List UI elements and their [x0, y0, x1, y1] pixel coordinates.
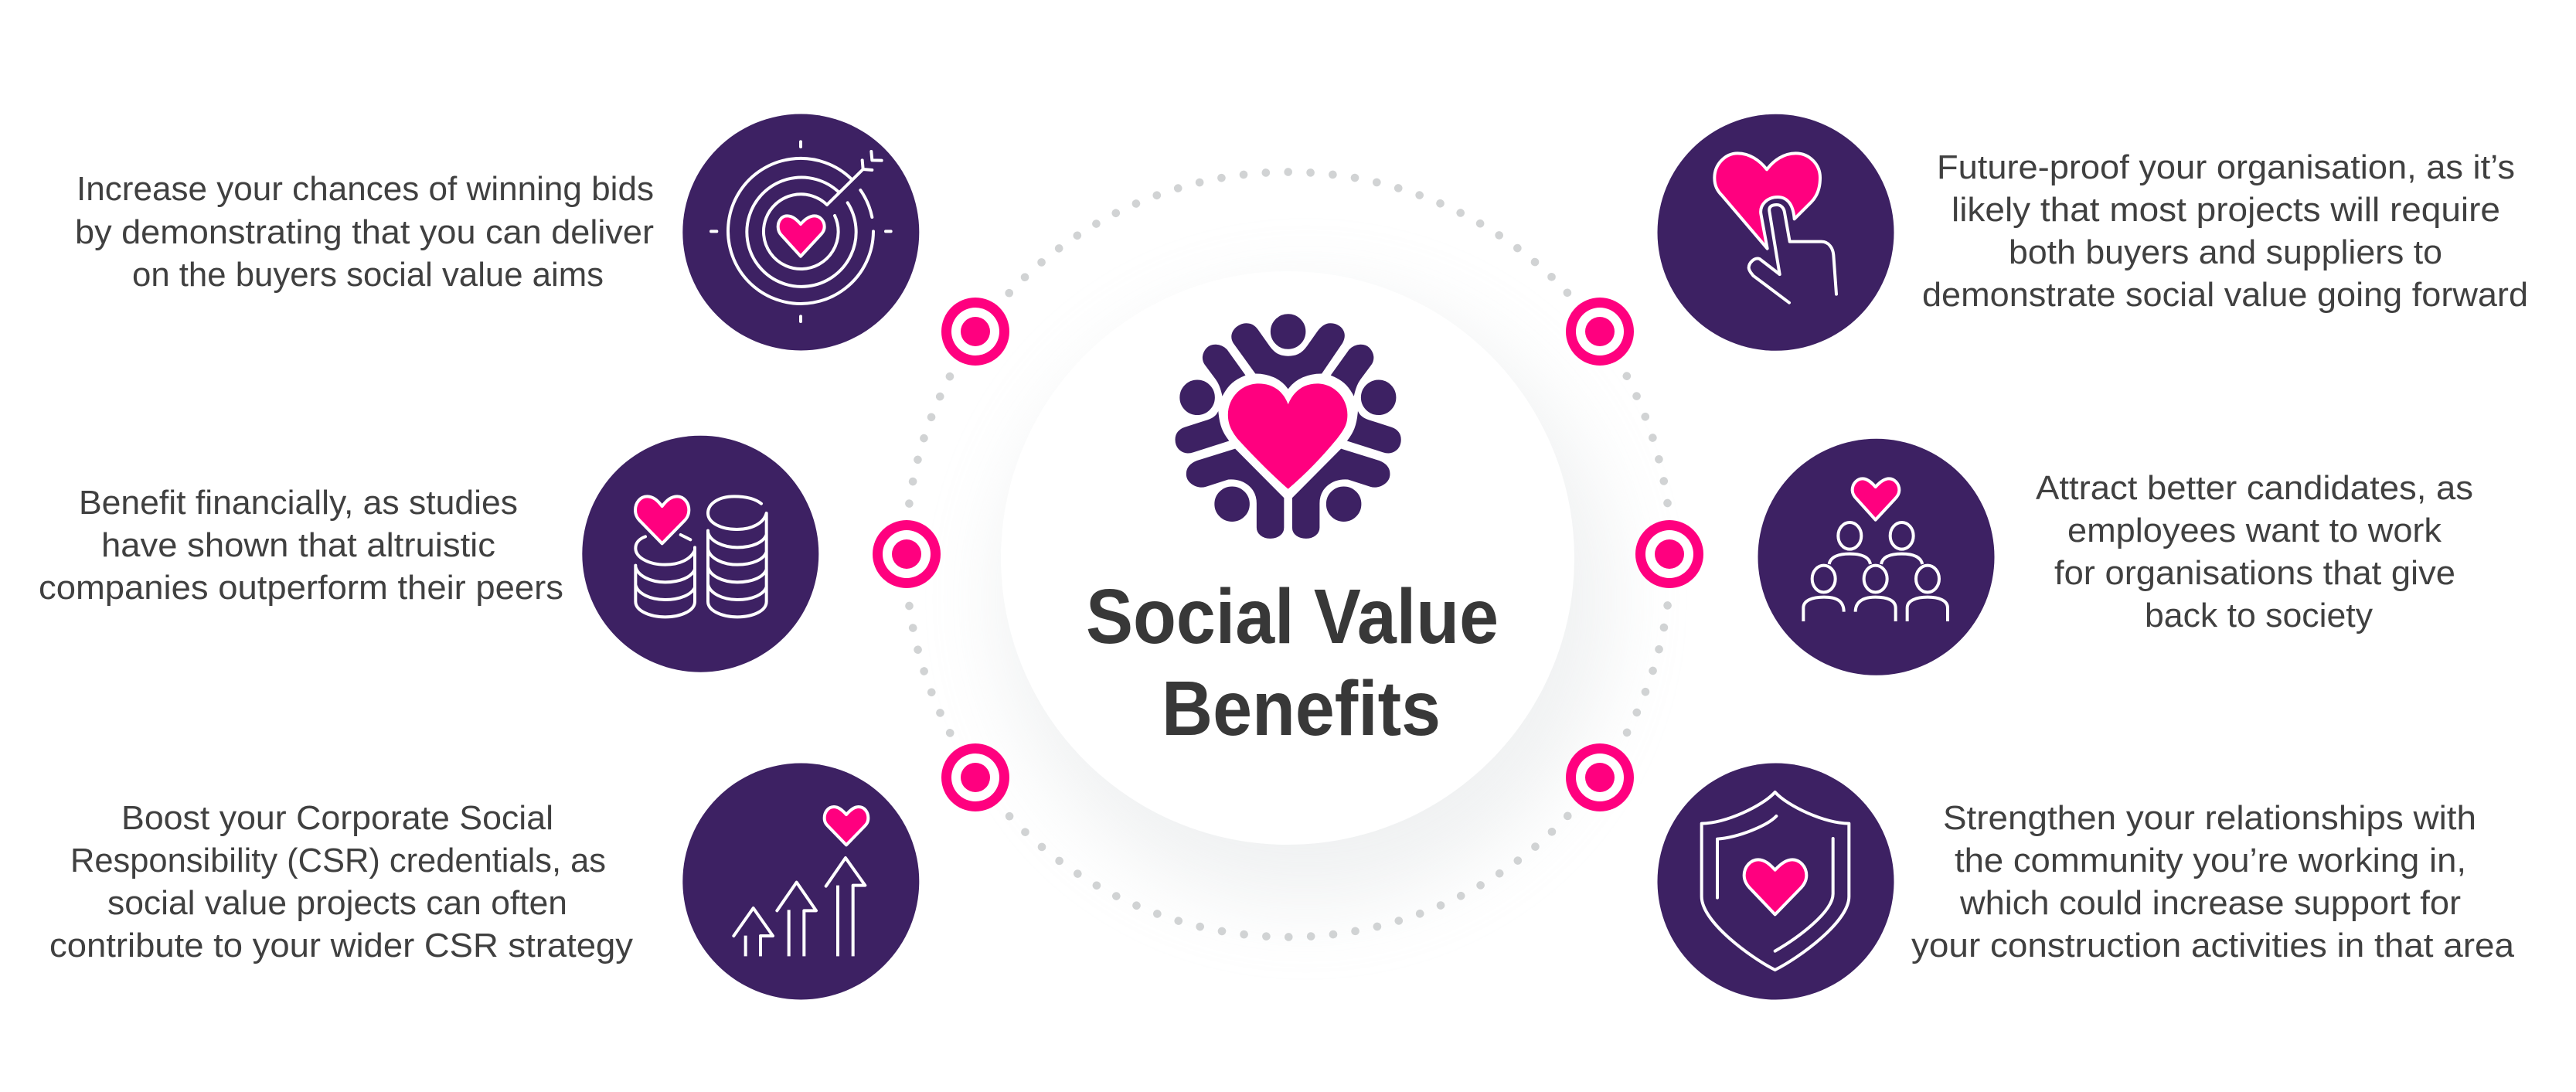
text: winning bids [75, 170, 654, 294]
marker: bottom right [1566, 743, 1634, 811]
text: attract candidates: Attract better candidates, as [2036, 469, 2473, 507]
icon: rising arrows with heart [682, 764, 919, 1000]
text: CSR credentials [49, 799, 633, 964]
icon: hand pressing heart [1657, 114, 1894, 351]
text: strengthen relationships: Strengthen your relationships with [1943, 799, 2476, 837]
marker: bottom left [941, 743, 1009, 811]
title: Benefits [1162, 665, 1441, 752]
icon: central people and heart logo [1176, 315, 1400, 538]
marker: middle right [1635, 520, 1703, 588]
text: attract candidates: for organisations that give [2054, 554, 2455, 592]
text: winning bids: by demonstrating that you can deliver [75, 213, 654, 251]
text: CSR credentials: Boost your Corporate Social [121, 799, 553, 837]
marker: top right [1566, 298, 1634, 366]
text: winning bids: Increase your chances of winning bids [77, 170, 654, 208]
text: attract candidates [2036, 469, 2473, 634]
text: benefit financially [39, 484, 563, 607]
central circle with soft shadow [1001, 271, 1611, 904]
marker: top left [941, 298, 1009, 366]
text: attract candidates: employees want to work [2067, 512, 2442, 549]
icon: shield with heart [1657, 764, 1894, 1000]
text: future-proof: Future-proof your organisation, as it’s [1937, 148, 2515, 186]
text: future-proof [1922, 148, 2528, 314]
text: benefit financially: have shown that altruistic [101, 526, 495, 564]
text: attract candidates: back to society [2145, 597, 2373, 634]
text: CSR credentials: contribute to your wider CSR strategy [49, 927, 633, 964]
text: strengthen relationships: which could increase support for [1959, 884, 2461, 922]
dotted ring [909, 172, 1668, 937]
text: benefit financially: Benefit financially, as studies [79, 484, 518, 522]
icon: coin stacks with heart [582, 436, 818, 672]
icon: target with arrow and heart [682, 114, 919, 351]
marker: middle left [873, 520, 941, 588]
title [1086, 573, 1499, 752]
text: future-proof: likely that most projects will require [1952, 191, 2500, 229]
text: CSR credentials: Responsibility (CSR) credentials, as [70, 842, 606, 879]
text: strengthen relationships [1911, 799, 2515, 964]
text: strengthen relationships: the community you’re working in, [1955, 842, 2466, 879]
text: strengthen relationships: your construction activities in that area [1911, 927, 2515, 964]
text: future-proof: both buyers and suppliers to [2009, 233, 2442, 271]
text: benefit financially: companies outperform their peers [39, 569, 563, 607]
text: winning bids: on the buyers social value aims [132, 256, 604, 294]
title: Social Value [1086, 573, 1499, 660]
icon: group of people with heart [1758, 439, 1994, 675]
text: future-proof: demonstrate social value going forward [1922, 276, 2528, 314]
text: CSR credentials: social value projects can often [107, 884, 567, 922]
